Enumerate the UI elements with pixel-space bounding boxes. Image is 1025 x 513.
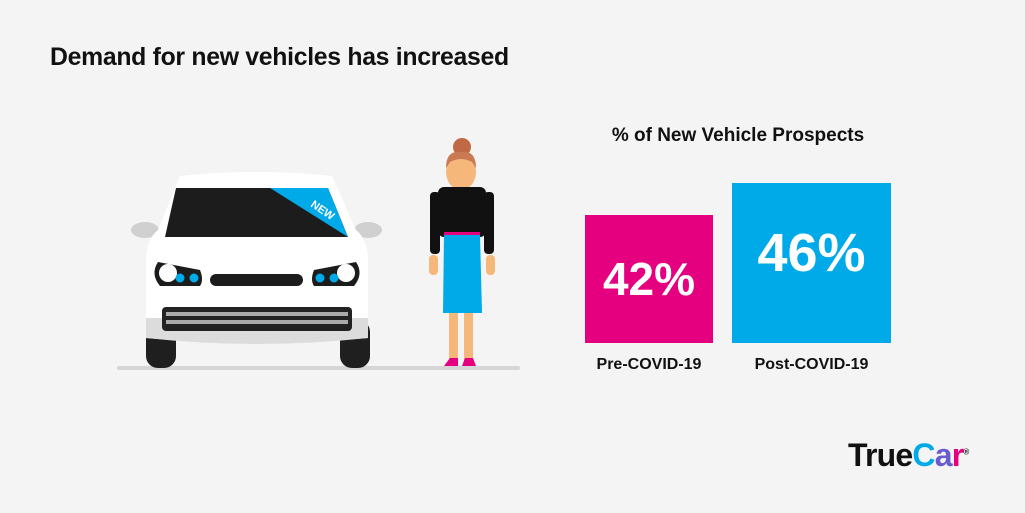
label pre: Pre-COVID-19 <box>597 356 701 373</box>
ground line <box>117 366 520 370</box>
bar: post-covid: 46% <box>757 223 866 283</box>
logo: TrueCar® <box>848 437 968 473</box>
label post: Post-COVID-19 <box>755 356 868 373</box>
title: Demand for new vehicles has increased <box>50 44 509 71</box>
chart heading: % of New Vehicle Prospects <box>612 125 864 146</box>
bar: pre-covid <box>585 215 713 343</box>
bar: pre-covid: 42% <box>603 253 695 305</box>
car: NEW <box>308 199 337 223</box>
woman <box>429 138 495 366</box>
bar: post-covid <box>732 183 891 343</box>
car <box>131 172 382 368</box>
illustration: car and woman <box>117 138 520 370</box>
